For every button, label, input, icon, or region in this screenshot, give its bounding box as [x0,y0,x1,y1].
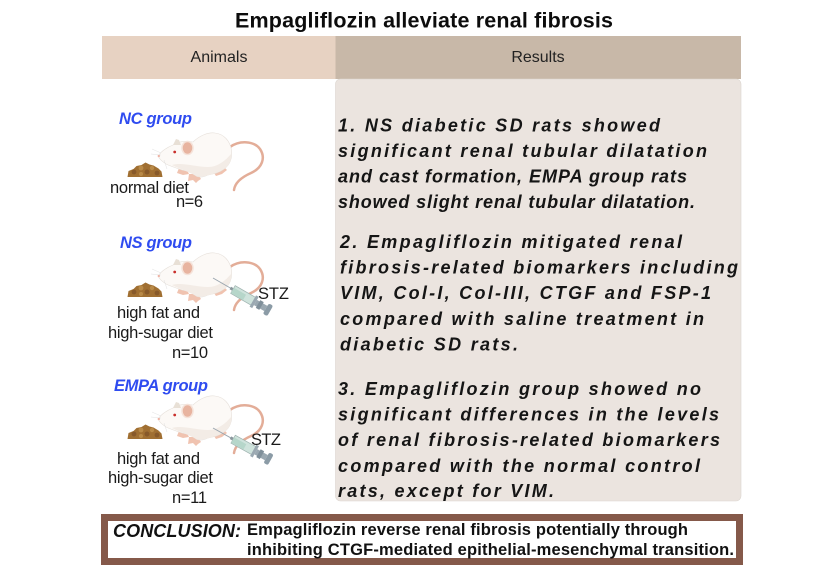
icon: NS syringe [210,272,273,317]
NS diet label: high-sugar diet [108,324,213,342]
result 3 text: rats, except for VIM. [338,481,554,501]
conclusion box [104,518,740,562]
result 2 text: 2. Empagliflozin mitigated renal [339,232,683,252]
result 3 text: significant differences in the levels [338,404,719,424]
NC sample size: n=6 [176,193,203,211]
icon: EMPA food pile [128,424,162,439]
result 3 text: 3. Empagliflozin group showed no [338,379,701,399]
header: Animals: Animals [191,49,247,66]
result 1 text [338,116,707,212]
panel: NC group [110,110,263,211]
title: Empagliflozin alleviate renal fibrosis [235,8,613,32]
icon: NS food pile [128,282,162,297]
EMPA diet label [108,450,213,487]
panel: NS group [108,234,289,362]
NS diet label [108,304,213,342]
NS group heading: NS group [120,234,192,252]
result 2 text: fibrosis-related biomarkers including [340,258,738,278]
result 3 text: compared with the normal control [338,456,701,476]
icon: EMPA syringe [210,422,274,466]
icon: NC rat [151,133,263,190]
icon: EMPA rat [151,396,263,453]
panel: results [336,79,741,501]
NS sample size: n=10 [172,344,208,362]
header: Animals [102,36,336,79]
result 2 text: compared with saline treatment in [340,309,704,329]
NS STZ label: STZ [258,285,289,303]
conclusion text: Empagliflozin reverse renal fibrosis potentially through [247,521,688,539]
conclusion text [247,521,734,559]
result 3 text: of renal fibrosis-related biomarkers [338,430,720,450]
conclusion label: CONCLUSION: [113,521,241,541]
result 1 text: showed slight renal tubular dilatation. [338,192,695,212]
conclusion text: inhibiting CTGF-mediated epithelial-mesenchymal transition. [247,541,734,559]
NC diet label: normal diet [110,179,189,197]
header: Results [336,36,741,79]
panel: EMPA group [108,377,281,507]
NC group heading: NC group [119,110,192,128]
result 1 text: 1. NS diabetic SD rats showed [338,116,661,136]
result 1 text: significant renal tubular dilatation [338,141,707,161]
result 3 text [338,379,720,501]
EMPA STZ label: STZ [251,431,281,449]
EMPA diet label: high fat and [117,450,200,468]
NS diet label: high fat and [117,304,200,322]
icon: NC food pile [128,162,162,177]
EMPA diet label: high-sugar diet [108,469,213,487]
result 2 text: VIM, Col-I, Col-III, CTGF and FSP-1 [340,283,711,303]
EMPA sample size: n=11 [172,489,207,507]
result 2 text: diabetic SD rats. [340,334,518,354]
icon: NS rat [151,253,263,310]
EMPA group heading: EMPA group [114,377,208,395]
header: Results: Results [511,49,565,66]
result 1 text: and cast formation, EMPA group rats [338,166,687,186]
result 2 text [339,232,738,354]
